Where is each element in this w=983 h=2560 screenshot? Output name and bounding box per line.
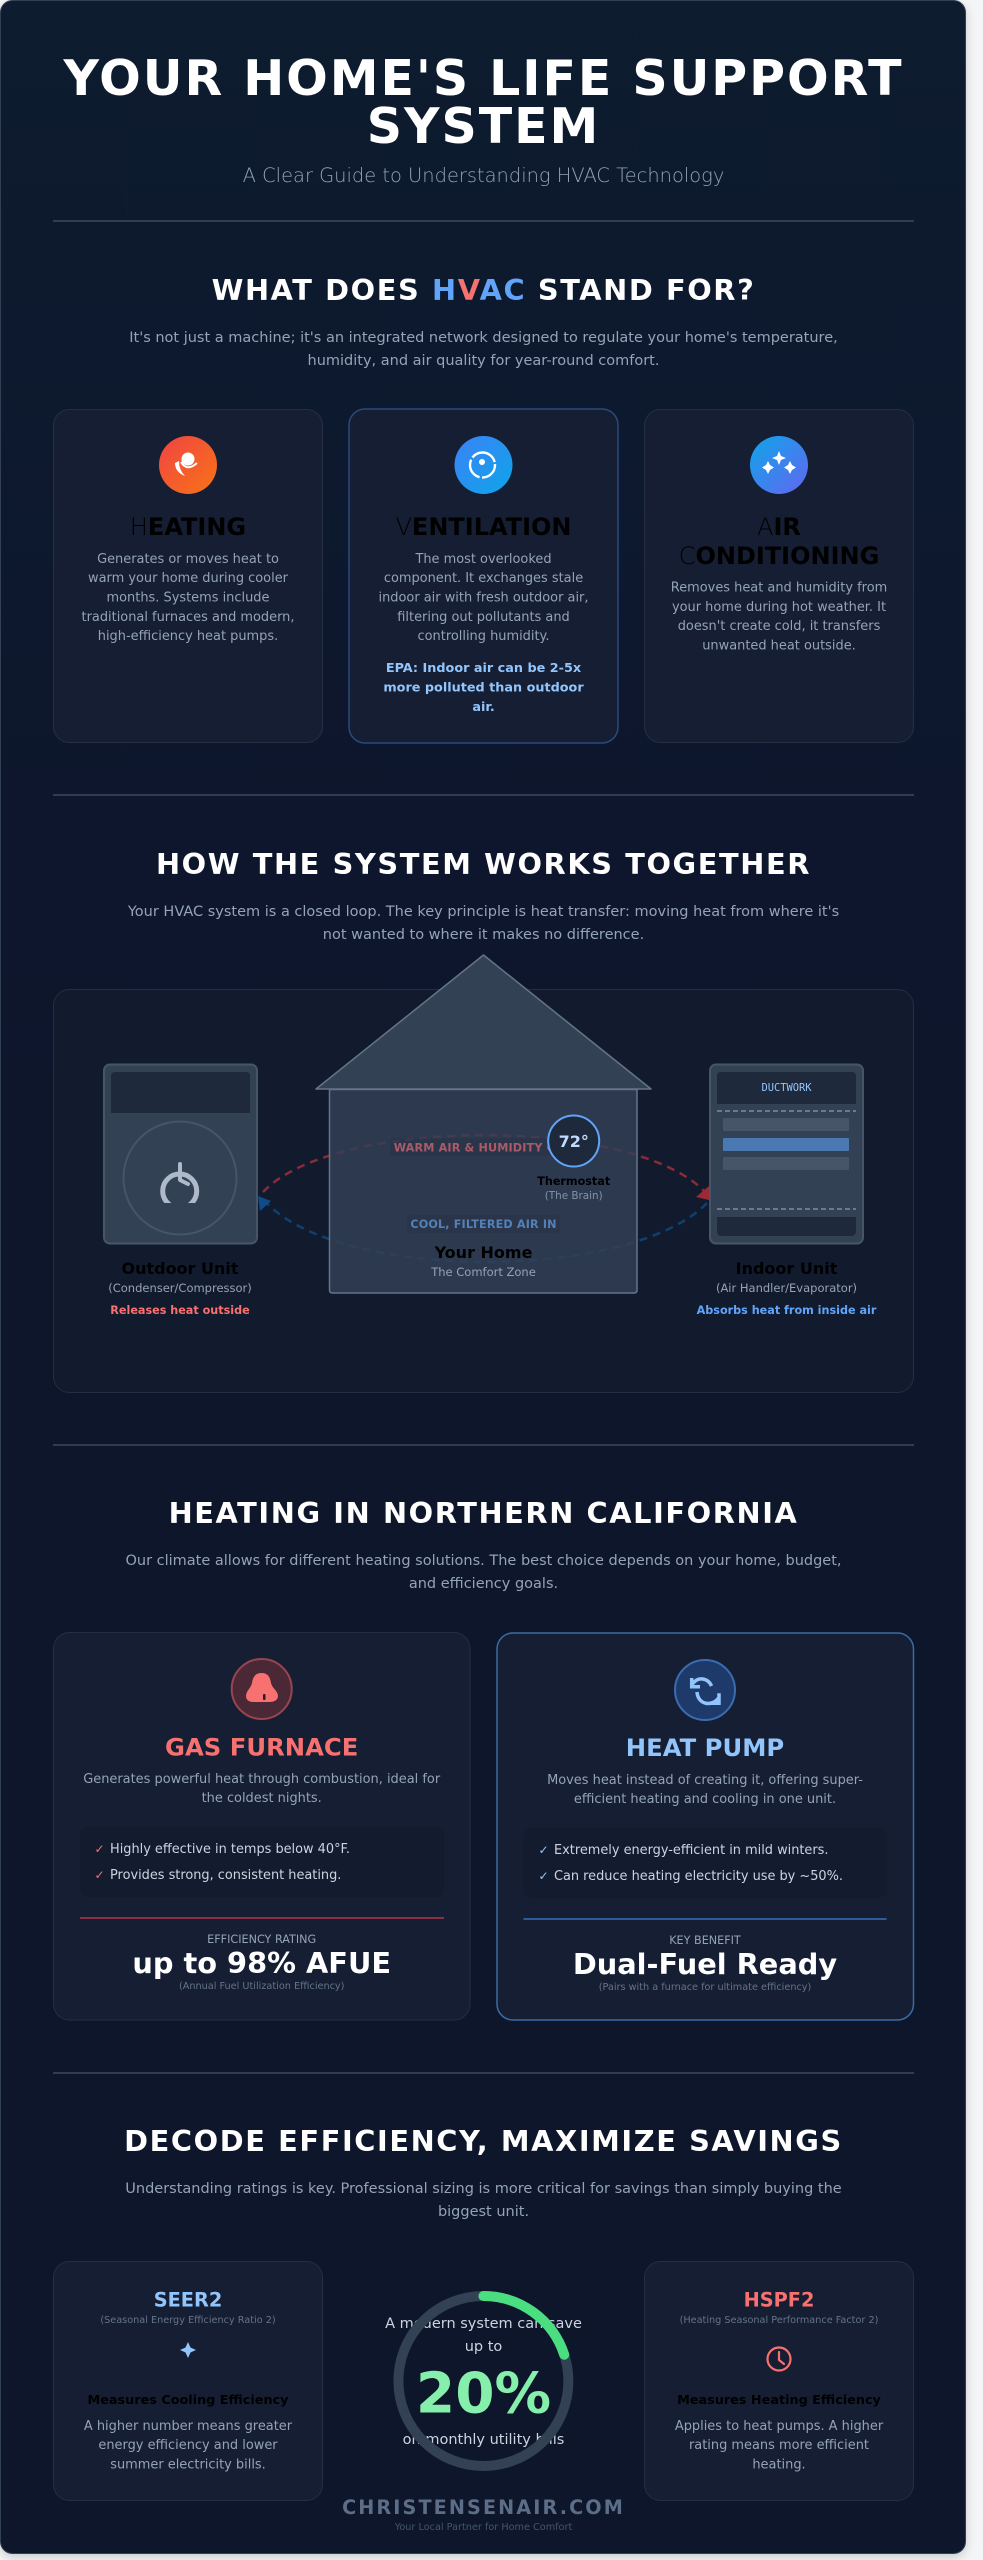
panel: system diagram bbox=[54, 955, 914, 1392]
gauge ring bbox=[398, 2296, 568, 2466]
checklist: gas furnace: Provides strong, consistent heating. bbox=[110, 1868, 341, 1883]
title bbox=[62, 50, 904, 155]
stat: efficiency rating: up to 98% AFUE bbox=[132, 1946, 391, 1980]
text: ventilation description: component. It exchanges stale bbox=[384, 571, 583, 586]
heading: heating in northern california: HEATING IN NORTHERN CALIFORNIA bbox=[169, 1496, 798, 1530]
text: seer2 details: A higher number means greater bbox=[84, 2419, 293, 2434]
text: hspf2 details: Applies to heat pumps. A higher bbox=[675, 2419, 884, 2434]
thermostat: Thermostat bbox=[537, 1175, 611, 1188]
icon: flame bbox=[232, 1659, 292, 1719]
thermostat: 72° bbox=[559, 1132, 589, 1151]
indoor unit: Indoor Unit bbox=[736, 1259, 838, 1278]
text: ventilation description: The most overlooked bbox=[414, 552, 552, 567]
indoor unit bbox=[697, 1064, 877, 1317]
title: YOUR HOME'S LIFE SUPPORT bbox=[62, 50, 904, 107]
panel: HSPF2: (Heating Seasonal Performance Factor 2) bbox=[680, 2315, 878, 2326]
section intro bbox=[129, 330, 838, 369]
label: your home: Your Home bbox=[434, 1243, 533, 1262]
arrow: cool air loop bbox=[258, 1196, 707, 1262]
heading: what does HVAC stand for: WHAT DOES HVAC STAND FOR? bbox=[212, 273, 755, 307]
text: gas furnace description: the coldest nights. bbox=[202, 1791, 322, 1806]
section intro bbox=[125, 2181, 842, 2220]
savings text and gauge bbox=[385, 2296, 582, 2466]
text: savings statement: up to bbox=[465, 2339, 502, 2355]
text: heating description bbox=[82, 552, 294, 644]
text: heating description: high-efficiency heat pumps. bbox=[98, 629, 278, 644]
text: air conditioning description: Removes heat and humidity from bbox=[671, 580, 887, 596]
heading: how the system works together: HOW THE SYSTEM WORKS TOGETHER bbox=[156, 847, 811, 881]
section intro bbox=[125, 1553, 842, 1592]
house illustration bbox=[316, 955, 651, 1293]
section intro: It's not just a machine; it's an integrated network designed to regulate your home's temperature, bbox=[129, 330, 838, 346]
section: what does HVAC stand for bbox=[54, 273, 914, 743]
text: heating description: months. Systems include bbox=[107, 590, 269, 606]
checklist: gas furnace: ✓ bbox=[94, 1868, 105, 1882]
text: seer2 details: summer electricity bills. bbox=[110, 2458, 266, 2472]
panel: ventilation bbox=[349, 409, 618, 743]
section: how the system works bbox=[54, 847, 914, 1392]
checklist: heat pump: ✓ bbox=[538, 1869, 549, 1883]
label: warm air: WARM AIR & HUMIDITY OUT bbox=[394, 1142, 574, 1154]
heading: SEER2: SEER2 bbox=[154, 2289, 222, 2312]
text: heating description: traditional furnaces and modern, bbox=[82, 610, 294, 625]
indoor unit: (Air Handler/Evaporator) bbox=[716, 1281, 857, 1295]
heading: air conditioning bbox=[679, 513, 879, 570]
section: heating in northern california bbox=[54, 1496, 914, 2020]
text: ventilation description bbox=[378, 552, 589, 644]
heading: heating: HEATING bbox=[130, 513, 246, 541]
checklist: heat pump: Can reduce heating electricity use by ~50%. bbox=[554, 1869, 843, 1884]
footer brand: CHRISTENSENAIR.COM bbox=[342, 2496, 625, 2519]
indoor unit: DUCTWORK bbox=[761, 1082, 812, 1094]
label: warm air bbox=[390, 1138, 577, 1156]
header bbox=[62, 50, 904, 187]
text: seer2 details: energy efficiency and lower bbox=[98, 2438, 278, 2453]
text: hspf2 details: rating means more efficient bbox=[689, 2438, 869, 2453]
subtitle: A Clear Guide to Understanding HVAC Technology bbox=[243, 164, 724, 187]
text: air conditioning description bbox=[671, 580, 887, 654]
checklist: gas furnace bbox=[80, 1827, 444, 1897]
text: air conditioning description: your home during hot weather. It bbox=[672, 600, 886, 615]
icon: heating bbox=[159, 436, 217, 494]
checklist: gas furnace: ✓ bbox=[94, 1842, 105, 1856]
outdoor unit: (Condenser/Compressor) bbox=[108, 1281, 252, 1295]
heading: air conditioning: CONDITIONING bbox=[679, 542, 879, 570]
callout: EPA statistic bbox=[383, 661, 584, 715]
label: cool air: COOL, FILTERED AIR IN bbox=[410, 1218, 557, 1231]
title: SYSTEM bbox=[367, 98, 600, 155]
icon: fan bbox=[163, 1164, 197, 1208]
stat: key benefit: Dual-Fuel Ready bbox=[573, 1947, 837, 1981]
thermostat bbox=[537, 1116, 611, 1202]
stat: efficiency rating bbox=[132, 1933, 391, 1992]
checklist: heat pump: ✓ bbox=[538, 1843, 549, 1857]
text: savings statement: on monthly utility bills bbox=[403, 2432, 564, 2448]
text: seer2 details bbox=[84, 2393, 293, 2472]
text: savings statement: A modern system can save bbox=[385, 2316, 582, 2332]
stat: efficiency rating: (Annual Fuel Utilization Efficiency) bbox=[179, 1981, 344, 1992]
label: your home: The Comfort Zone bbox=[430, 1265, 536, 1279]
text: heat pump description bbox=[547, 1773, 863, 1807]
outdoor unit: Releases heat outside bbox=[110, 1304, 250, 1317]
panel: heating bbox=[54, 410, 322, 742]
icon: air conditioning bbox=[750, 436, 808, 494]
stat: key benefit bbox=[573, 1934, 837, 1993]
text: savings statement bbox=[385, 2316, 582, 2448]
section intro: and efficiency goals. bbox=[409, 1576, 558, 1592]
text: ventilation description: filtering out pollutants and bbox=[397, 610, 570, 625]
text: gas furnace description: Generates powerful heat through combustion, ideal for bbox=[83, 1772, 441, 1787]
text: air conditioning description: unwanted heat outside. bbox=[702, 638, 856, 654]
text: hspf2 details: Measures Heating Efficiency bbox=[677, 2393, 882, 2408]
footer tagline: Your Local Partner for Home Comfort bbox=[394, 2522, 572, 2533]
stat: key benefit: KEY BENEFIT bbox=[669, 1934, 741, 1947]
panel: air conditioning bbox=[644, 410, 914, 742]
panel: HSPF2 bbox=[644, 2262, 914, 2500]
callout: EPA statistic: EPA: Indoor air can be 2-5x bbox=[386, 661, 582, 676]
stat: key benefit: (Pairs with a furnace for ultimate efficiency) bbox=[599, 1982, 811, 1993]
text: seer2 details: Measures Cooling Efficiency bbox=[87, 2393, 289, 2408]
icon: cooling sparkle bbox=[180, 2342, 196, 2358]
text: hspf2 details: heating. bbox=[752, 2458, 806, 2472]
arrow: warm air loop bbox=[263, 1135, 713, 1201]
text: hspf2 details bbox=[675, 2393, 884, 2472]
section intro: Our climate allows for different heating solutions. The best choice depends on your home, budget, bbox=[125, 1553, 842, 1569]
section intro: Your HVAC system is a closed loop. The key principle is heat transfer: moving heat from where it's bbox=[127, 904, 839, 920]
text: heating description: Generates or moves heat to bbox=[97, 552, 279, 567]
outdoor unit: Outdoor Unit bbox=[121, 1259, 239, 1278]
text: gas furnace description bbox=[83, 1772, 441, 1806]
callout: EPA statistic: air. bbox=[472, 700, 495, 715]
section intro: Understanding ratings is key. Professional sizing is more critical for savings than simply buying the bbox=[125, 2181, 842, 2197]
section intro: biggest unit. bbox=[438, 2204, 529, 2220]
icon: heat pump cycle bbox=[675, 1660, 735, 1720]
text: ventilation description: controlling humidity. bbox=[418, 629, 549, 644]
outdoor unit bbox=[104, 1064, 257, 1317]
icon: ventilation bbox=[454, 436, 512, 494]
panel: heat pump bbox=[497, 1633, 914, 2020]
section intro bbox=[127, 904, 839, 943]
footer bbox=[342, 2496, 625, 2533]
text: ventilation description: indoor air with fresh outdoor air, bbox=[378, 590, 589, 606]
heading: ventilation: VENTILATION bbox=[396, 513, 572, 541]
panel: SEER2: (Seasonal Energy Efficiency Ratio 2) bbox=[100, 2315, 276, 2326]
heading: air conditioning: AIR bbox=[757, 513, 801, 541]
checklist: heat pump: Extremely energy-efficient in mild winters. bbox=[554, 1843, 828, 1858]
section intro: not wanted to where it makes no difference. bbox=[323, 927, 644, 943]
text: savings statement: 20% bbox=[416, 2362, 551, 2427]
callout: EPA statistic: more polluted than outdoor bbox=[383, 680, 584, 696]
checklist: heat pump bbox=[524, 1828, 886, 1898]
thermostat: (The Brain) bbox=[545, 1190, 603, 1202]
section intro: humidity, and air quality for year-round comfort. bbox=[308, 353, 659, 369]
text: heat pump description: efficient heating and cooling in one unit. bbox=[574, 1792, 836, 1807]
heading: HSPF2: HSPF2 bbox=[744, 2289, 814, 2312]
label: your home bbox=[430, 1243, 536, 1279]
panel: gas furnace bbox=[54, 1632, 470, 2020]
heading: decode efficiency: DECODE EFFICIENCY, MAXIMIZE SAVINGS bbox=[124, 2124, 843, 2158]
section: decode efficiency bbox=[54, 2124, 914, 2500]
indoor unit: Absorbs heat from inside air bbox=[697, 1304, 877, 1317]
text: heat pump description: Moves heat instead of creating it, offering super- bbox=[547, 1773, 863, 1788]
stat: efficiency rating: EFFICIENCY RATING bbox=[207, 1933, 316, 1946]
heading: heat pump: HEAT PUMP bbox=[626, 1733, 784, 1762]
text: heating description: warm your home during cooler bbox=[88, 571, 289, 586]
panel: SEER2 bbox=[54, 2262, 322, 2500]
label: cool air bbox=[407, 1215, 560, 1233]
text: air conditioning description: doesn't create cold, it transfers bbox=[678, 619, 881, 634]
icon: clock bbox=[768, 2348, 790, 2370]
heading: gas furnace: GAS FURNACE bbox=[165, 1733, 358, 1762]
checklist: gas furnace: Highly effective in temps below 40°F. bbox=[110, 1842, 350, 1857]
